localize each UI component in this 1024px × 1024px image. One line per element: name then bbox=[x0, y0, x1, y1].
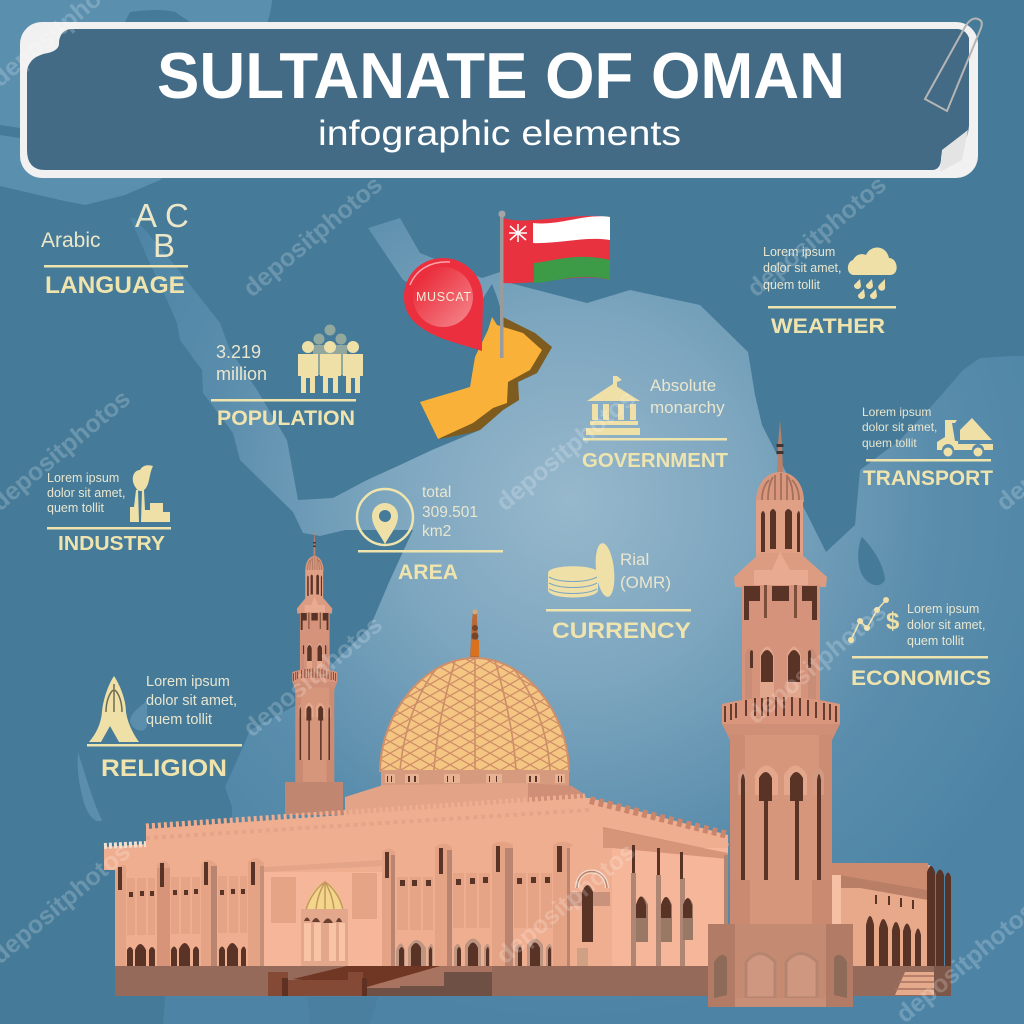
roof bbox=[345, 783, 590, 820]
central stairs bbox=[268, 966, 492, 996]
icon: growth chart bbox=[848, 597, 900, 643]
title banner bbox=[20, 19, 982, 178]
panel: transport bbox=[862, 405, 993, 490]
icon: letters: C bbox=[165, 197, 189, 234]
panel: weather: WEATHER bbox=[771, 315, 885, 338]
right facade bays bbox=[382, 842, 573, 966]
panel: population: million bbox=[216, 364, 267, 384]
panel: transport: Lorem ipsum bbox=[862, 405, 931, 419]
icon: people bbox=[298, 324, 363, 393]
map pin: Muscat: MUSCAT bbox=[416, 290, 471, 304]
watermarks: depositphotos bbox=[742, 597, 892, 730]
watermarks: depositphotos bbox=[491, 384, 641, 517]
panel: economics: ECONOMICS bbox=[851, 667, 991, 690]
watermarks: depositphotos bbox=[491, 837, 641, 970]
right minaret bbox=[722, 420, 840, 925]
icon: coins bbox=[548, 542, 617, 598]
panel: currency: Rial bbox=[620, 550, 649, 569]
main dome bbox=[380, 610, 569, 790]
panel: area: AREA bbox=[398, 561, 458, 584]
panel: weather bbox=[763, 245, 897, 338]
icon: factory bbox=[130, 465, 170, 522]
panel: weather: Lorem ipsum bbox=[763, 245, 835, 259]
panel: currency bbox=[546, 542, 691, 643]
panel: industry: dolor sit amet, bbox=[47, 486, 126, 500]
panel: language bbox=[41, 197, 189, 299]
watermarks: depositphotos bbox=[742, 170, 892, 303]
panel: industry: INDUSTRY bbox=[58, 533, 166, 555]
panel: transport: TRANSPORT bbox=[863, 467, 993, 490]
panel: area: km2 bbox=[422, 523, 451, 540]
panel: religion: RELIGION bbox=[101, 755, 227, 782]
small kiosk bbox=[301, 882, 348, 966]
panel: government: monarchy bbox=[650, 398, 725, 417]
left minaret bbox=[285, 530, 343, 815]
flag of Oman bbox=[498, 210, 610, 358]
panel: transport: quem tollit bbox=[862, 436, 917, 450]
panel: economics: Lorem ipsum bbox=[907, 602, 979, 616]
panel: industry: Lorem ipsum bbox=[47, 471, 119, 485]
icon: growth chart: $ bbox=[886, 608, 900, 635]
panel: currency: CURRENCY bbox=[552, 618, 691, 643]
panel: religion: Lorem ipsum bbox=[146, 674, 230, 690]
main wall bbox=[104, 798, 728, 966]
plinth bbox=[115, 966, 715, 996]
panel: transport: dolor sit amet, bbox=[862, 420, 937, 434]
icon: praying hands bbox=[89, 676, 139, 742]
panel: industry: quem tollit bbox=[47, 501, 104, 515]
right wing building bbox=[832, 863, 951, 996]
panel: population: POPULATION bbox=[217, 407, 355, 430]
left facade bays bbox=[115, 858, 384, 966]
panel: area bbox=[357, 484, 503, 584]
right minaret base bbox=[708, 924, 853, 1007]
panel: religion: quem tollit bbox=[146, 712, 212, 728]
panel: government: GOVERNMENT bbox=[582, 449, 728, 472]
right receding wing bbox=[603, 828, 728, 966]
icon: letters bbox=[135, 197, 189, 264]
panel: industry bbox=[47, 465, 171, 555]
icon: location pin bbox=[357, 489, 413, 545]
icon: letters: A bbox=[135, 197, 157, 234]
icon: paper clip bbox=[925, 19, 982, 111]
panel: religion: dolor sit amet, bbox=[146, 693, 237, 709]
panel: economics: dolor sit amet, bbox=[907, 618, 986, 632]
panel: area: total bbox=[422, 484, 451, 501]
map of Oman bbox=[420, 317, 552, 439]
watermarks: depositphotos bbox=[238, 170, 388, 303]
icon: dump truck bbox=[937, 418, 993, 456]
panel: language: LANGUAGE bbox=[45, 272, 185, 299]
title: SULTANATE OF OMAN bbox=[157, 39, 845, 112]
entrance section bbox=[570, 846, 626, 966]
icon: columned building bbox=[586, 376, 640, 435]
panel: weather: quem tollit bbox=[763, 278, 820, 292]
panel: religion bbox=[87, 674, 242, 782]
panel: population: 3.219 bbox=[216, 342, 261, 362]
icon: letters: B bbox=[153, 227, 175, 264]
panel: government bbox=[582, 376, 728, 472]
panel: weather: dolor sit amet, bbox=[763, 261, 842, 275]
panel: population bbox=[211, 324, 363, 430]
watermarks: depositphotos bbox=[238, 610, 388, 743]
icon: rain cloud bbox=[848, 247, 897, 299]
panel: government: Absolute bbox=[650, 376, 716, 395]
panel: area: 309.501 bbox=[422, 504, 478, 521]
map pin: Muscat bbox=[404, 258, 483, 351]
panel: language: Arabic bbox=[41, 229, 101, 252]
panel: economics bbox=[848, 597, 991, 690]
panel: economics: quem tollit bbox=[907, 634, 964, 648]
panel: currency: (OMR) bbox=[620, 573, 671, 592]
crenellations bbox=[104, 797, 728, 847]
subtitle: infographic elements bbox=[318, 114, 681, 153]
mosque illustration bbox=[104, 420, 951, 1007]
